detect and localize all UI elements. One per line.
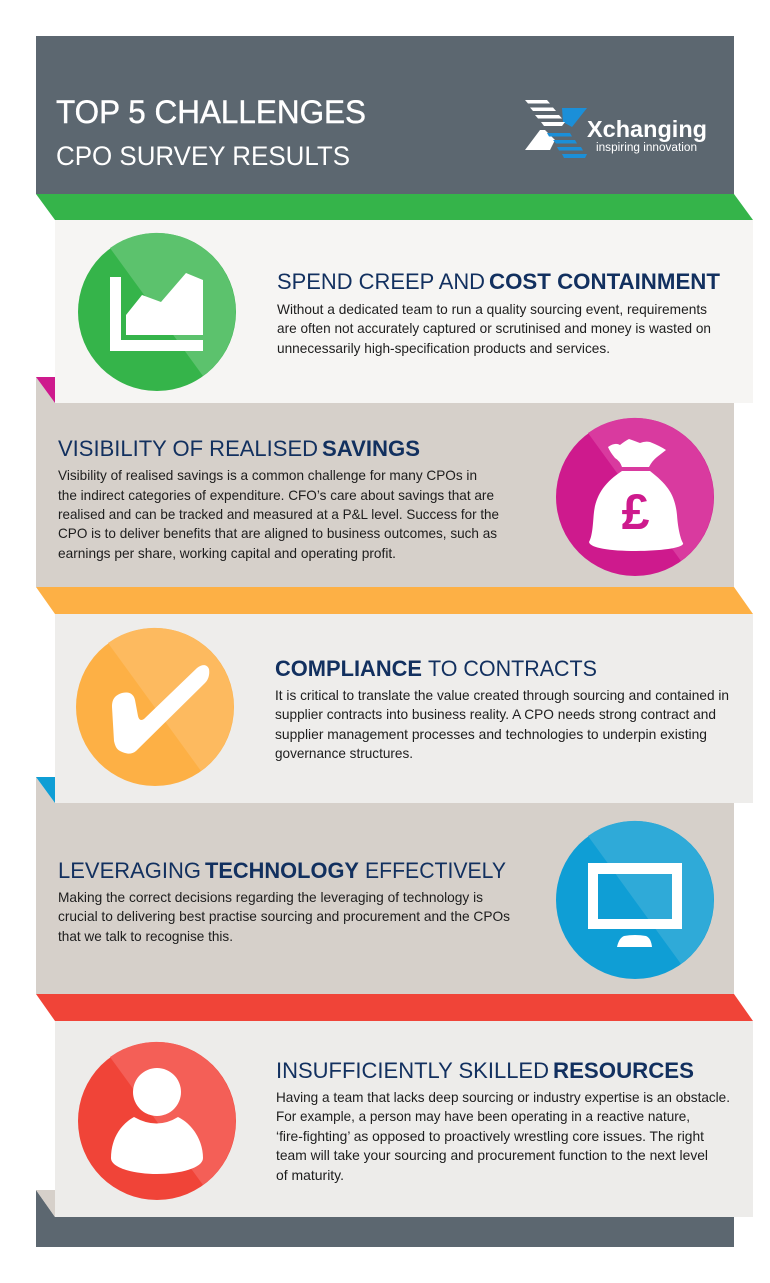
panel: compliance to contracts (36, 587, 753, 803)
fold: magenta corner (36, 377, 55, 403)
panel: spend creep and cost containment (36, 194, 753, 403)
body text: unnecessarily high-specification products and services. (277, 340, 610, 356)
body text: of maturity. (276, 1167, 344, 1183)
subtitle: CPO SURVEY RESULTS (56, 141, 350, 171)
title: TOP 5 CHALLENGES (56, 94, 366, 130)
body text: CPO is to deliver benefits that are aligned to business outcomes, such as (58, 525, 497, 541)
body text: Visibility of realised savings is a common challenge for many CPOs in (58, 467, 477, 483)
heading (277, 269, 721, 294)
heading: COMPLIANCE (275, 656, 422, 681)
body text: team will take your sourcing and procurement function to the next level (276, 1147, 708, 1163)
body text: that we talk to recognise this. (58, 928, 233, 944)
heading (58, 858, 506, 883)
body text: are often not accurately captured or scrutinised and money is wasted on (277, 320, 711, 336)
body text (277, 301, 711, 356)
body text: realised and can be tracked and measured at a P&L level. Success for the (58, 506, 499, 522)
header panel (36, 36, 734, 194)
body text: crucial to delivering best practise sourcing and procurement and the CPOs (58, 908, 510, 924)
heading: COST CONTAINMENT (489, 269, 721, 294)
body text: governance structures. (275, 745, 413, 761)
body text (276, 1089, 730, 1183)
body text: It is critical to translate the value created through sourcing and contained in (275, 687, 729, 703)
icon: money bag: £ (622, 484, 650, 540)
body text: supplier contracts into business reality. A CPO needs strong contract and (275, 706, 716, 722)
body text: supplier management processes and technologies to underpin existing (275, 726, 707, 742)
body text: ‘fire-fighting’ as opposed to proactively wrestling core issues. The right (276, 1128, 704, 1144)
body text (58, 467, 499, 561)
logo: Xchanging (525, 100, 707, 158)
heading (276, 1058, 694, 1083)
heading: SAVINGS (322, 436, 420, 461)
logo: Xchanging: inspiring innovation (596, 142, 697, 154)
icon: check mark (76, 628, 234, 786)
body text: earnings per share, working capital and operating profit. (58, 545, 396, 561)
heading: INSUFFICIENTLY SKILLED (276, 1058, 549, 1083)
heading: RESOURCES (553, 1058, 694, 1083)
body text: the indirect categories of expenditure. CFO’s care about savings that are (58, 487, 494, 503)
footer panel (36, 1190, 734, 1247)
icon: money bag (556, 418, 714, 576)
panel: leveraging technology effectively (36, 777, 734, 994)
body text: Having a team that lacks deep sourcing or industry expertise is an obstacle. (276, 1089, 730, 1105)
heading: SPEND CREEP AND (277, 269, 485, 294)
logo: Xchanging: Xchanging (587, 116, 707, 142)
heading: VISIBILITY OF REALISED (58, 436, 318, 461)
body text: For example, a person may have been operating in a reactive nature, (276, 1108, 690, 1124)
icon: monitor (556, 821, 714, 979)
body text (58, 889, 510, 944)
heading (275, 656, 597, 681)
heading: TO CONTRACTS (428, 656, 597, 681)
body text: Making the correct decisions regarding the leveraging of technology is (58, 889, 483, 905)
heading: LEVERAGING (58, 858, 201, 883)
heading: TECHNOLOGY (205, 858, 359, 883)
panel: visibility of realised savings (36, 377, 734, 587)
body text: Without a dedicated team to run a quality sourcing event, requirements (277, 301, 707, 317)
body text (275, 687, 729, 761)
fold: blue corner (36, 777, 55, 803)
icon: area chart (78, 233, 236, 391)
heading: EFFECTIVELY (365, 858, 506, 883)
icon: person (78, 1042, 236, 1200)
panel: insufficiently skilled resources (36, 994, 753, 1217)
